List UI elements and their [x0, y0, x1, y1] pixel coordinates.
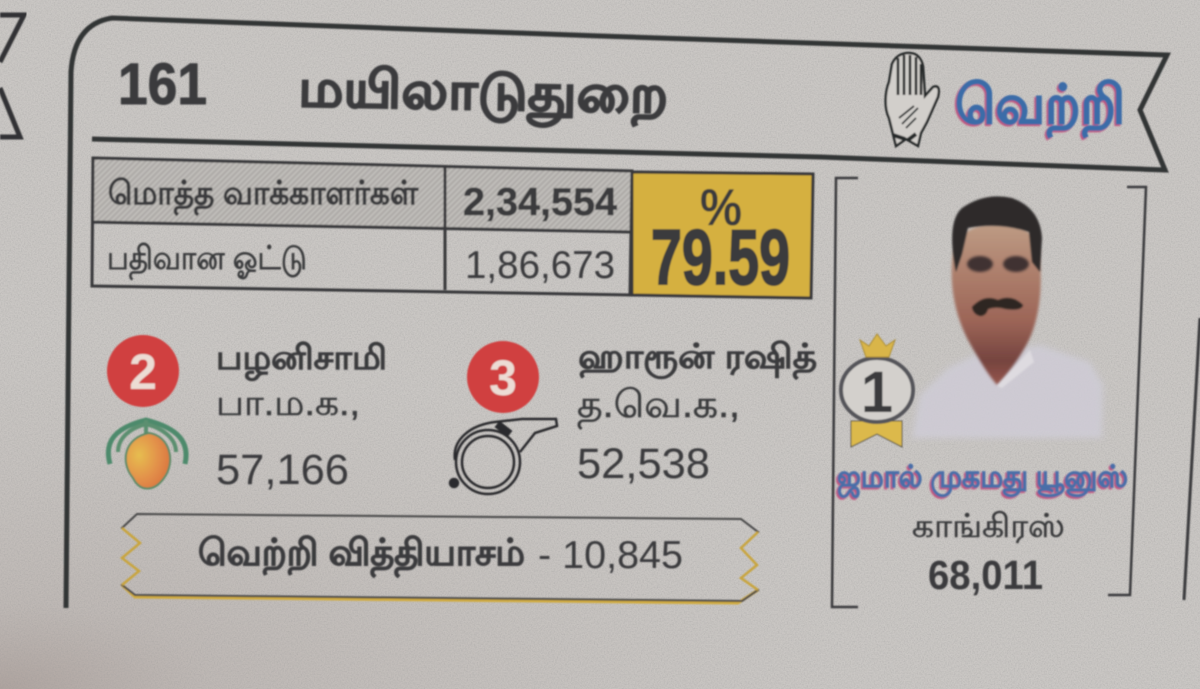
neighbouring panel edge: right: [1184, 318, 1200, 600]
party name: த.வெ.க.,: [577, 384, 740, 429]
margin label: வெற்றி வித்தியாசம்: [198, 532, 525, 578]
winner name: ஜமால் முகமது யூனுஸ்: [837, 459, 1128, 498]
icon: mango: [108, 420, 186, 488]
moustache: [972, 298, 1023, 316]
polled votes value: 1,86,673: [465, 244, 615, 287]
rank badge 3: [467, 341, 539, 413]
hair: [952, 196, 1042, 272]
face and neck: [952, 224, 1041, 385]
turnout percentage: 79.59: [651, 213, 790, 301]
candidate name: பழனிசாமி: [216, 339, 387, 381]
title: constituency name: மயிலாடுதுறை: [298, 60, 669, 129]
panel: winner: [832, 178, 1146, 607]
winner label: வெற்றி: [955, 75, 1125, 139]
card frame and ribbon header: [66, 18, 1167, 608]
candidate: second place: [107, 335, 387, 494]
callout zigzag gold accents: [122, 528, 758, 590]
neighbouring panel edge: left: [0, 15, 24, 137]
callout: victory margin: [122, 514, 758, 603]
icon: open hand party symbol: [886, 53, 939, 146]
eyes: [967, 256, 993, 272]
rank badge 2: 2: [129, 344, 157, 400]
winner votes: 68,011: [928, 552, 1043, 598]
votes: 57,166: [216, 446, 349, 494]
table: voter statistics: [92, 158, 813, 301]
party name: பா.ம.க.,: [216, 382, 360, 423]
icon: whistle: [450, 419, 557, 494]
percentage box: [630, 172, 813, 298]
candidate: third place: [450, 338, 817, 494]
total voters row background: [93, 158, 632, 232]
rank number: 1: [861, 360, 893, 425]
polled votes label: பதிவான ஓட்டு: [107, 239, 307, 280]
percent sign: %: [700, 179, 742, 237]
winner rank medal: [841, 334, 913, 447]
rank badge 3: 3: [489, 350, 517, 406]
total voters label: மொத்த வாக்காளர்கள்: [108, 174, 419, 216]
rank badge 2: [107, 335, 179, 407]
ribbon: [851, 421, 902, 447]
table grid: [92, 158, 632, 295]
votes: 52,538: [577, 440, 710, 488]
title: constituency number: 161: [118, 52, 207, 117]
winner party: காங்கிரஸ்: [912, 507, 1065, 544]
margin value: - 10,845: [538, 534, 683, 577]
collar: [997, 350, 1034, 388]
winner photo: [912, 196, 1103, 438]
callout ribbon outline: [122, 514, 758, 601]
total voters value: 2,34,554: [463, 181, 617, 224]
panel: constituency result card: [66, 18, 1167, 608]
medal ring: [841, 358, 913, 422]
shirt: [912, 345, 1103, 438]
winner frame brackets: [832, 178, 1146, 607]
crown: [860, 334, 895, 357]
candidate name: ஹாரூன் ரஷித்: [578, 338, 817, 380]
callout ribbon shadow: [122, 585, 758, 603]
